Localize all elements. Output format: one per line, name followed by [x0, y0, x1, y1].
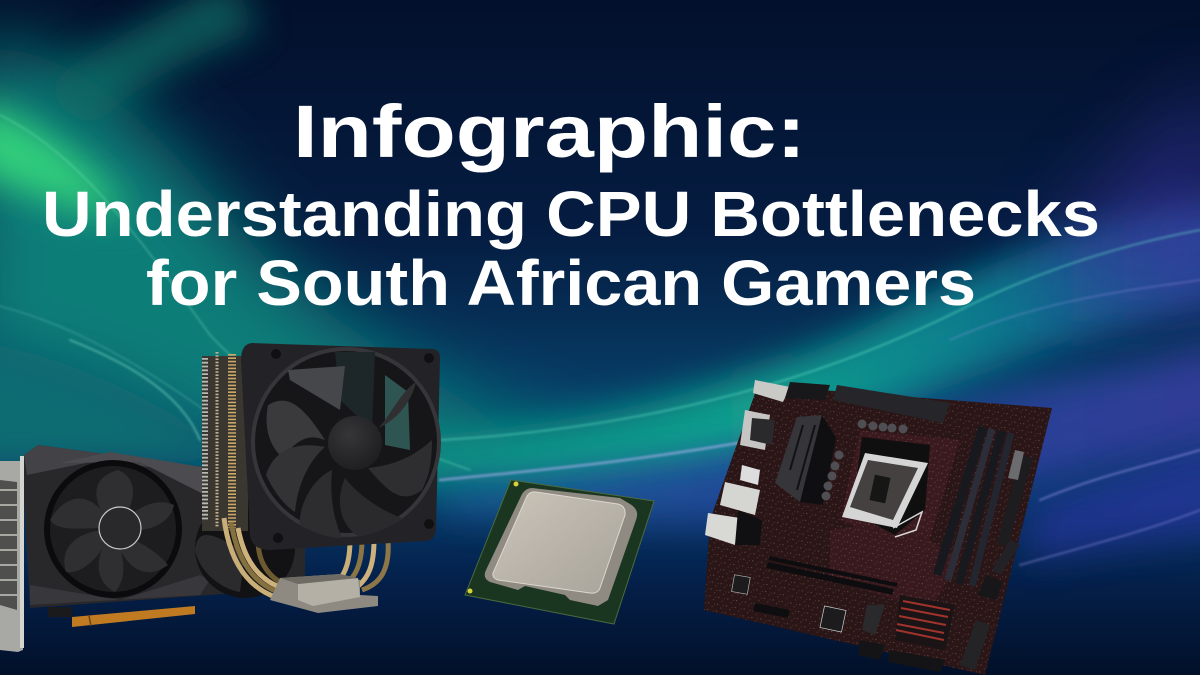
right-edge connectors: [992, 450, 1033, 575]
CPU socket: [842, 437, 930, 537]
heat pipes: [224, 518, 388, 602]
hub: [328, 416, 382, 470]
card body: [24, 445, 305, 608]
cooler fan: [241, 343, 440, 550]
red heatsink: [895, 595, 955, 650]
icon: graphics card: [0, 445, 305, 652]
base plate: [270, 574, 378, 613]
fin stack: [202, 352, 248, 531]
icon: CPU cooler: [202, 343, 440, 613]
top IHS: [493, 492, 625, 593]
PCB: [704, 385, 1052, 675]
gpu fan 2: [195, 498, 295, 598]
gold connector: [48, 606, 195, 627]
IO ports: [705, 380, 830, 545]
title line 2: Understanding CPU Bottlenecks: [42, 178, 1100, 250]
hub: [99, 507, 141, 549]
icon: CPU processor: [465, 480, 654, 624]
PCIe slot: [767, 558, 897, 592]
title: [42, 90, 1100, 319]
bracket: [0, 456, 24, 652]
RAM slots: [937, 427, 1011, 586]
substrate: [465, 480, 654, 624]
title line 1: Infographic:: [293, 90, 806, 173]
VRM heatsinks: [775, 385, 950, 505]
gpu fan 1: [44, 460, 182, 598]
title line 3: for South African Gamers: [146, 247, 976, 319]
lower dark blocks: [858, 575, 1003, 672]
chips: [732, 575, 885, 635]
icon: motherboard: [704, 380, 1052, 675]
heatsink seen through fan: [335, 352, 375, 430]
lower IHS: [485, 488, 637, 606]
